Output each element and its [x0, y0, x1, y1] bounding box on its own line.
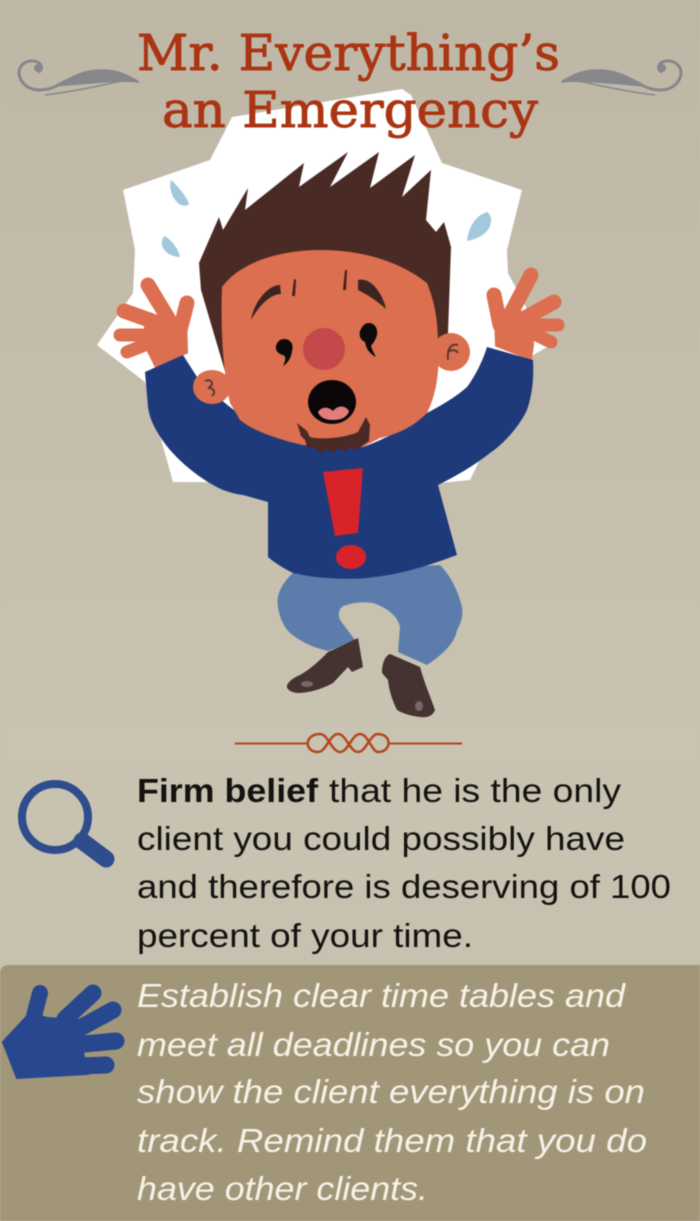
white starburst behind character — [97, 89, 547, 483]
mouth — [308, 380, 356, 424]
nose — [303, 328, 345, 370]
icon: blue hand — [3, 993, 116, 1078]
tongue — [318, 406, 349, 420]
text block: firm belief: percent of your time. — [137, 917, 473, 954]
panel: advice — [0, 965, 700, 1221]
title — [137, 24, 560, 139]
advice text — [137, 977, 647, 1207]
advice text: show the client everything is on — [137, 1073, 645, 1110]
right hand — [494, 275, 558, 358]
eyebrows — [251, 270, 386, 320]
right flourish — [562, 61, 681, 95]
title: an Emergency — [162, 81, 539, 139]
sweater — [145, 347, 533, 579]
text block: firm belief: Firm belief — [137, 772, 319, 809]
text block: firm belief — [137, 772, 671, 954]
right shoe — [382, 654, 435, 717]
advice text: track. Remind them that you do — [137, 1122, 647, 1159]
right ear — [432, 333, 470, 371]
trousers — [278, 565, 462, 665]
advice text: Establish clear time tables and — [137, 977, 627, 1014]
exclamation mark — [323, 468, 366, 569]
knot divider — [235, 734, 462, 752]
hair — [199, 152, 451, 378]
icon: magnifying glass — [22, 784, 106, 859]
left ear — [193, 370, 231, 404]
left hand — [120, 285, 187, 365]
text block: firm belief: and therefore is deserving of 100 — [137, 868, 671, 905]
eyes — [276, 323, 377, 366]
advice text: meet all deadlines so you can — [137, 1026, 610, 1063]
goatee — [297, 417, 370, 453]
title: Mr. Everything’s — [137, 24, 560, 82]
left shoe — [287, 638, 363, 693]
sweat drops — [162, 180, 491, 257]
character — [120, 152, 558, 717]
text block: firm belief: client you could possibly have — [137, 820, 625, 857]
text block: firm belief: that he is the only — [329, 772, 622, 809]
left flourish — [19, 61, 138, 95]
face — [222, 250, 439, 447]
advice text: have other clients. — [137, 1170, 428, 1207]
